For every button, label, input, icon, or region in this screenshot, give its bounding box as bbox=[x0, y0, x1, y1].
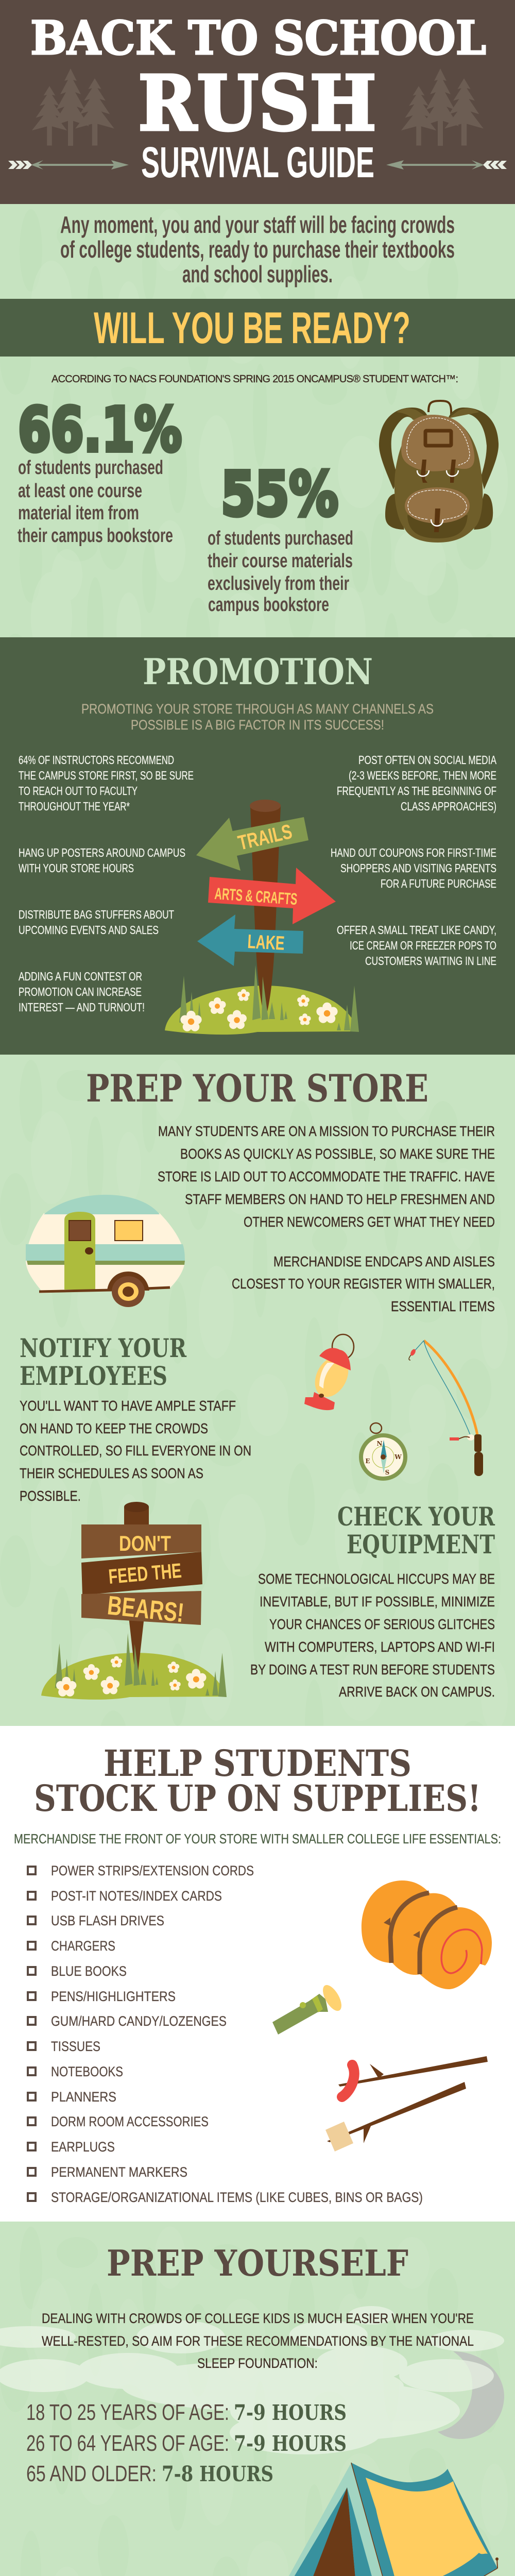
arrow: trails bbox=[196, 817, 308, 871]
text: intro bbox=[60, 211, 455, 287]
text: stat 2 description: exclusively from their bbox=[208, 573, 349, 595]
text: stat 1 description: at least one course bbox=[18, 480, 142, 502]
heading: help students bbox=[34, 1742, 481, 1820]
stat: 66.1%: 66.1% bbox=[18, 394, 182, 465]
icon: signpost bbox=[165, 800, 359, 1035]
text: sign lettering: BEARS! bbox=[106, 1590, 185, 1629]
checklist: STORAGE/ORGANIZATIONAL ITEMS (LIKE CUBES, BINS OR BAGS) bbox=[51, 2190, 423, 2205]
heading: notify your employees bbox=[20, 1333, 186, 1391]
panel: intro background bbox=[0, 204, 515, 912]
text: promotion tips left: 64% OF INSTRUCTORS RECOMMEND bbox=[19, 753, 174, 767]
text: promotion tips left: HANG UP POSTERS AROUND CAMPUS bbox=[19, 846, 185, 859]
checklist: POST-IT NOTES/INDEX CARDS bbox=[51, 1888, 222, 1904]
checklist: BLUE BOOKS bbox=[51, 1963, 127, 1979]
text: stat 2 description bbox=[208, 528, 353, 616]
text: notify body: CONTROLLED, SO FILL EVERYONE IN ON bbox=[20, 1443, 251, 1459]
panel: help students stock up bbox=[0, 1726, 515, 2222]
text: notify body: ON HAND TO KEEP THE CROWDS bbox=[20, 1420, 208, 1436]
text: promotion tips left: PROMOTION CAN INCREASE bbox=[19, 985, 142, 998]
icon: right trees bbox=[401, 69, 484, 146]
text: promotion tips left: INTEREST — AND TURNOUT! bbox=[19, 1001, 145, 1014]
checklist: CHARGERS bbox=[51, 1938, 115, 1954]
text: promotion intro bbox=[81, 701, 434, 733]
text: stat 1 description bbox=[18, 457, 173, 547]
icon: don't feed the bears sign bbox=[41, 1502, 227, 1700]
panel: prep yourself background bbox=[0, 2222, 515, 2576]
text: sleep recommendations bbox=[26, 2400, 347, 2486]
icon: roasting sticks bbox=[325, 2056, 488, 2151]
heading: notify your employees: NOTIFY YOUR bbox=[20, 1333, 186, 1363]
title: survival guide: SURVIVAL GUIDE bbox=[141, 138, 374, 187]
checklist: POWER STRIPS/EXTENSION CORDS bbox=[51, 1863, 254, 1878]
text: sleep recommendations: 26 TO 64 YEARS OF AGE: bbox=[26, 2431, 229, 2456]
arrow: left bbox=[8, 160, 129, 170]
text: promotion tips left: ADDING A FUN CONTEST OR bbox=[19, 970, 142, 983]
text: stat 1 description: material item from bbox=[18, 502, 139, 524]
stat: 55% bbox=[208, 459, 353, 616]
text: sign lettering: DON'T bbox=[119, 1531, 171, 1555]
text: promotion tips left: THE CAMPUS STORE FIRST, SO BE SURE bbox=[19, 769, 194, 782]
title: back to school: BACK TO SCHOOL bbox=[30, 11, 486, 65]
stat: 55%: 55% bbox=[221, 459, 338, 530]
text: check equipment body bbox=[250, 1571, 495, 1700]
heading: notify your employees: EMPLOYEES bbox=[20, 1361, 167, 1391]
text: promotion tips right bbox=[331, 753, 496, 968]
text: sign lettering: FEED THE bbox=[108, 1560, 182, 1588]
text: notify body: THEIR SCHEDULES AS SOON AS bbox=[20, 1465, 203, 1481]
icon: compass: E bbox=[365, 1458, 370, 1465]
heading: prep yourself: PREP YOURSELF bbox=[107, 2243, 408, 2284]
text: stat 2 description: of students purchased bbox=[208, 528, 353, 549]
title: rush: RUSH bbox=[138, 59, 376, 148]
checklist: NOTEBOOKS bbox=[51, 2064, 123, 2079]
text: sleep intro bbox=[42, 2311, 474, 2371]
icon: compass: S bbox=[385, 1469, 389, 1476]
text: source line: ACCORDING TO NACS FOUNDATION'S SPRING 2015 ONCAMPUS® STUDENT WATCH™: bbox=[52, 374, 458, 385]
text: promotion intro: PROMOTING YOUR STORE THROUGH AS MANY CHANNELS AS bbox=[81, 701, 434, 717]
text: promotion tips left: DISTRIBUTE BAG STUFFERS ABOUT bbox=[19, 908, 174, 921]
heading: check your equipment bbox=[337, 1501, 495, 1560]
arrow: trails: TRAILS bbox=[236, 820, 294, 855]
clouds: upper bbox=[0, 2306, 504, 2454]
arrow: lake bbox=[197, 914, 303, 966]
icon: lantern bbox=[304, 1334, 355, 1410]
text: promotion tips left bbox=[19, 753, 194, 1014]
text: sleep recommendations: 18 TO 25 YEARS OF AGE: bbox=[26, 2400, 229, 2425]
text: prep your store body: ESSENTIAL ITEMS bbox=[391, 1298, 495, 1314]
checklist: EARPLUGS bbox=[51, 2139, 115, 2155]
checklist: GUM/HARD CANDY/LOZENGES bbox=[51, 2013, 227, 2029]
icon: compass bbox=[359, 1423, 407, 1481]
text: promotion intro: POSSIBLE IS A BIG FACTOR IN ITS SUCCESS! bbox=[131, 717, 384, 733]
panel: will you be ready band bbox=[0, 299, 515, 357]
icon: moon bbox=[438, 2351, 504, 2439]
arrow: arts and crafts: ARTS & CRAFTS bbox=[214, 884, 298, 908]
icon: sleeping bag bbox=[362, 1880, 492, 1989]
arrow: right bbox=[386, 160, 507, 170]
panel: promotion bbox=[0, 637, 515, 1055]
text: sleep intro: SLEEP FOUNDATION: bbox=[197, 2355, 318, 2371]
text: promotion tips left: WITH YOUR STORE HOURS bbox=[19, 861, 134, 875]
checklist bbox=[28, 1863, 423, 2205]
text: promotion tips left: UPCOMING EVENTS AND SALES bbox=[19, 923, 159, 937]
heading: prep your store: PREP YOUR STORE bbox=[86, 1066, 428, 1111]
icon: fishing rod bbox=[409, 1341, 483, 1476]
icon: tent bbox=[278, 2463, 499, 2576]
arrow: arts and crafts bbox=[208, 868, 336, 924]
text: notify body: YOU'LL WANT TO HAVE AMPLE STAFF bbox=[20, 1398, 236, 1414]
icon: flashlight bbox=[272, 1982, 345, 2035]
panel: prep your store background bbox=[0, 1055, 515, 1814]
text: sleep recommendations: 65 AND OLDER: bbox=[26, 2461, 157, 2486]
text: prep your store body bbox=[158, 1123, 495, 1314]
checklist: PENS/HIGHLIGHTERS bbox=[51, 1989, 176, 2004]
icon: compass: W bbox=[394, 1453, 402, 1461]
icon: backpack bbox=[379, 401, 499, 543]
text: stat 2 description: their course materials bbox=[208, 550, 353, 572]
text: promotion tips left: THROUGHOUT THE YEAR* bbox=[19, 800, 130, 813]
text: stat 1 description: of students purchased bbox=[18, 457, 163, 479]
text: notify body bbox=[20, 1398, 251, 1504]
text: notify body: POSSIBLE. bbox=[20, 1488, 81, 1504]
checklist: PERMANENT MARKERS bbox=[51, 2164, 187, 2180]
text: sleep recommendations: 7-9 HOURS bbox=[234, 2431, 347, 2456]
heading: help students: HELP STUDENTS bbox=[104, 1742, 411, 1785]
checklist: USB FLASH DRIVES bbox=[51, 1913, 164, 1928]
checklist: PLANNERS bbox=[51, 2089, 116, 2105]
panel: header bbox=[0, 0, 515, 204]
text: intro: and school supplies. bbox=[182, 261, 333, 287]
text: stat 2 description: campus bookstore bbox=[208, 594, 329, 616]
heading: promotion: PROMOTION bbox=[143, 651, 373, 693]
checklist: TISSUES bbox=[51, 2039, 100, 2054]
text: stat 1 description: their campus bookstore bbox=[18, 525, 173, 547]
text: sign lettering bbox=[106, 1531, 185, 1629]
icon: camper trailer bbox=[26, 1195, 185, 1307]
checklist: DORM ROOM ACCESSORIES bbox=[51, 2114, 209, 2129]
text: sleep recommendations: 7-9 HOURS bbox=[234, 2400, 347, 2425]
text: promotion tips left: TO REACH OUT TO FACULTY bbox=[19, 784, 138, 798]
icon: left trees bbox=[32, 69, 114, 146]
icon: compass: N bbox=[377, 1440, 383, 1447]
stat: 66.1% bbox=[18, 394, 182, 547]
text: sleep recommendations: 7-8 HOURS bbox=[162, 2462, 273, 2486]
arrow: lake: LAKE bbox=[247, 931, 285, 955]
